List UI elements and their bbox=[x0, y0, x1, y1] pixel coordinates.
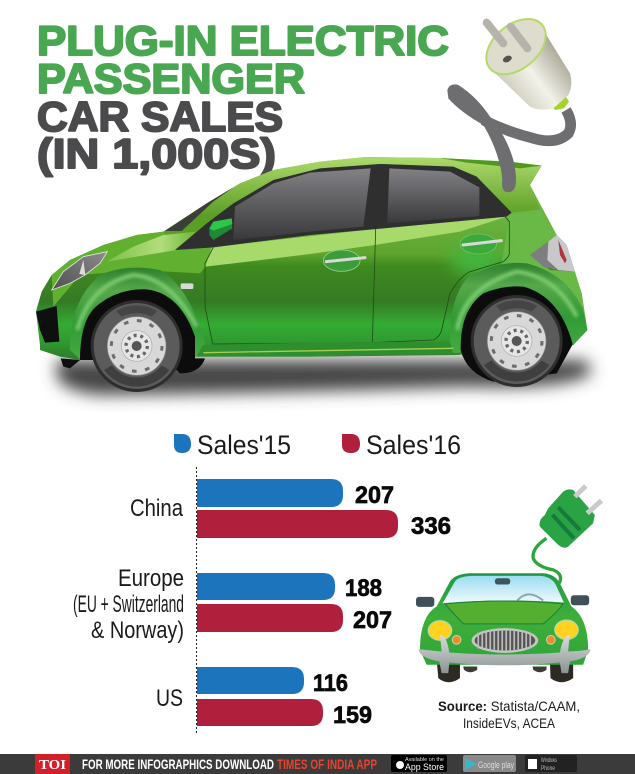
source bbox=[438, 698, 580, 731]
title: (IN 1,000S) bbox=[37, 130, 276, 177]
headlight bbox=[52, 252, 107, 290]
spoiler edge bbox=[440, 158, 542, 168]
ground shadow bbox=[57, 360, 592, 395]
rear wheel well bbox=[461, 286, 573, 382]
steering wheel bbox=[517, 594, 543, 601]
cable upper ribbon bbox=[447, 84, 516, 192]
large green hatchback car bbox=[36, 157, 592, 395]
value China 2016: 336 bbox=[411, 513, 451, 540]
label US: US bbox=[156, 685, 183, 712]
label China: China bbox=[130, 495, 184, 522]
left indicator bbox=[452, 636, 461, 644]
plug body bbox=[487, 21, 571, 110]
belt line highlight bbox=[205, 217, 507, 267]
front fender highlight bbox=[77, 275, 197, 330]
TOI logo bbox=[35, 754, 70, 774]
hood highlight bbox=[107, 232, 197, 262]
value US 2016: 159 bbox=[333, 702, 372, 729]
value China 2015: 207 bbox=[355, 482, 394, 509]
label Europe bbox=[73, 565, 184, 644]
door seams bbox=[205, 217, 509, 344]
legend label 2015: Sales'15 bbox=[197, 430, 291, 460]
legend swatch 2016 bbox=[342, 434, 360, 453]
China 2016 bar bbox=[197, 510, 398, 538]
title: CAR SALES bbox=[37, 93, 283, 140]
front window bbox=[233, 168, 371, 240]
US 2015 bar bbox=[197, 667, 304, 694]
green plug bbox=[540, 486, 601, 548]
label Europe: (EU + Switzerland bbox=[73, 591, 184, 618]
rear wheel bbox=[471, 295, 563, 387]
sill bbox=[197, 342, 453, 357]
App Store badge bbox=[391, 755, 447, 772]
tail light bbox=[530, 235, 575, 272]
App Store badge: App Store bbox=[405, 762, 444, 772]
rear-view mirror bbox=[495, 578, 510, 585]
source: InsideEVs, ACEA bbox=[463, 715, 556, 731]
under tyres bbox=[463, 666, 547, 672]
tyres bbox=[437, 660, 573, 682]
plug and cable bbox=[447, 8, 571, 192]
window frame bbox=[175, 164, 512, 250]
front wheel bbox=[91, 300, 183, 392]
Europe 2016 bar bbox=[197, 604, 343, 632]
left headlight bbox=[428, 621, 452, 640]
Windows Phone badge: Windows bbox=[541, 758, 557, 764]
US 2016 bar bbox=[197, 699, 323, 726]
Windows Phone badge bbox=[525, 755, 577, 772]
door green glow bbox=[450, 245, 503, 275]
value Europe 2015: 188 bbox=[345, 575, 382, 602]
small green car with plug bbox=[416, 486, 601, 682]
footer app name: TIMES OF INDIA APP bbox=[277, 756, 377, 772]
socket hole bbox=[502, 54, 513, 64]
front chin shadow bbox=[61, 358, 80, 368]
car body bbox=[36, 157, 587, 360]
A-pillar dark sliver bbox=[165, 187, 233, 231]
title: PLUG-IN ELECTRIC bbox=[37, 17, 449, 64]
China 2015 bar bbox=[197, 479, 343, 507]
plug face bbox=[476, 8, 556, 85]
radiator grille bbox=[472, 628, 538, 653]
rear fender highlight bbox=[457, 272, 577, 330]
windscreen frame and body bbox=[420, 573, 588, 665]
TOI logo: TOI bbox=[39, 758, 66, 773]
fender top panel bbox=[52, 232, 213, 307]
front door handle bbox=[323, 250, 365, 271]
right headlight bbox=[555, 620, 578, 639]
right side mirror bbox=[571, 595, 589, 605]
prong bbox=[511, 27, 527, 48]
green cable bbox=[533, 538, 561, 585]
front fender bbox=[70, 268, 206, 359]
prong bbox=[487, 23, 503, 43]
legend swatch 2015 bbox=[174, 434, 191, 453]
rear door handle bbox=[460, 234, 501, 254]
rear window bbox=[387, 168, 479, 223]
right indicator bbox=[547, 636, 555, 644]
footer call to action: FOR MORE INFOGRAPHICS DOWNLOAD bbox=[82, 756, 274, 772]
label Europe: & Norway) bbox=[91, 617, 184, 644]
cable lower loop bbox=[483, 110, 571, 141]
legend bbox=[174, 430, 461, 460]
title bbox=[37, 17, 449, 177]
source: Source: Statista/CAAM, bbox=[438, 698, 580, 714]
legend label 2016: Sales'16 bbox=[366, 430, 461, 460]
Windows Phone badge: Phone bbox=[541, 766, 556, 772]
value US 2015: 116 bbox=[313, 670, 348, 697]
front grille bbox=[36, 306, 59, 343]
value Europe 2016: 207 bbox=[353, 607, 392, 634]
App Store badge: Available on the bbox=[405, 757, 444, 763]
bumper bbox=[418, 635, 590, 673]
side marker bbox=[181, 283, 193, 289]
roof and rear pillar bbox=[163, 157, 542, 250]
rear quarter panel bbox=[500, 209, 587, 330]
windscreen bbox=[443, 576, 564, 603]
title: PASSENGER bbox=[37, 55, 305, 102]
Europe 2015 bar bbox=[197, 573, 335, 600]
plug neck bbox=[552, 95, 569, 110]
Google Play badge: Google play bbox=[478, 760, 514, 770]
label Europe: Europe bbox=[118, 565, 184, 592]
front wheel well bbox=[80, 289, 205, 373]
Google Play badge bbox=[463, 755, 516, 772]
left side mirror bbox=[416, 597, 434, 607]
hood bbox=[445, 601, 563, 624]
bar chart bbox=[73, 467, 451, 735]
wing mirror bbox=[209, 218, 232, 240]
footer bar bbox=[0, 754, 635, 774]
rear fender bbox=[450, 263, 587, 353]
